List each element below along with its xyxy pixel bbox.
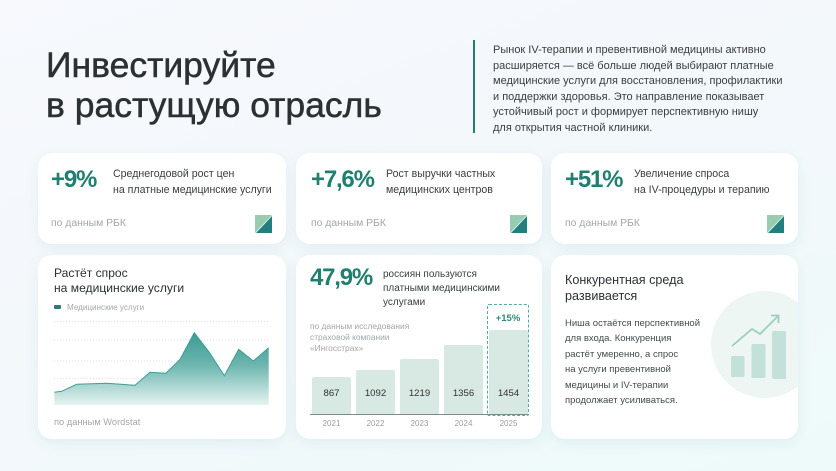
source: по данным РБК (311, 218, 386, 229)
source: по данным РБК (565, 218, 640, 229)
legend: Медицинские услуги (67, 303, 144, 312)
stat description: на IV-процедуры и терапию (634, 184, 769, 196)
bar chart: 2022 (367, 419, 384, 428)
bar chart: 2025 (500, 419, 517, 428)
survey source: «Ингосстрах» (310, 343, 363, 353)
body text: продолжает усиливаться. (565, 395, 678, 406)
survey source (310, 321, 409, 353)
bar chart: 867 (323, 388, 340, 399)
survey source: по данным исследования (310, 321, 409, 331)
body text: Ниша остаётся перспективной (565, 318, 700, 329)
intro text block: устойчивый рост и формирует перспективную нишу (493, 106, 758, 118)
title: в растущую отрасль (46, 85, 382, 125)
bar chart: 2021 (323, 419, 340, 428)
source: по данным Wordstat (54, 417, 140, 427)
bar chart: 1219 (409, 388, 430, 399)
intro text block (473, 40, 782, 133)
intro text block: Рынок IV-терапии и превентивной медицины активно (493, 44, 766, 56)
survey source: страховой компании (310, 332, 389, 342)
title (46, 45, 382, 125)
body text: растёт умеренно, а спрос (565, 349, 678, 360)
panel: stat +9% (38, 153, 286, 244)
panel: stat +7,6% (296, 153, 542, 244)
icon: split square (255, 215, 272, 233)
stat description: Рост выручки частных (386, 168, 495, 180)
stat number: +7,6% (311, 166, 374, 193)
bar chart: 2023 (411, 419, 428, 428)
chart heading: на медицинские услуги (54, 281, 184, 295)
heading: развивается (565, 288, 637, 302)
icon: split square (767, 215, 784, 233)
stat description (113, 168, 272, 196)
stat description: на платные медицинские услуги (113, 184, 272, 196)
stat description (386, 168, 495, 196)
icon: growth chart in circle (711, 291, 798, 398)
bar chart: 2024 (455, 419, 472, 428)
body text: для входа. Конкуренция (565, 333, 671, 344)
bar chart: 1454 (498, 388, 519, 399)
panel: stat +51% (551, 153, 798, 244)
source: по данным РБК (51, 218, 126, 229)
intro text block: медицинские услуги для восстановления, профилактики (493, 75, 782, 87)
stat description: Увеличение спроса (634, 168, 729, 180)
chart heading: Растёт спрос (54, 266, 128, 280)
stat number: +51% (565, 166, 622, 193)
survey description: россиян пользуются (383, 269, 477, 280)
heading (565, 273, 684, 302)
stat description: Среднегодовой рост цен (113, 168, 234, 180)
stat description: медицинских центров (386, 184, 493, 196)
body text: на услуги превентивной (565, 364, 671, 375)
body text: медицины и IV-терапии (565, 380, 668, 391)
survey number: 47,9% (310, 264, 372, 291)
survey description: услугами (383, 297, 425, 308)
bar chart: 1356 (453, 388, 474, 399)
body text (565, 318, 700, 406)
intro text block: расширяется — всё больше людей выбирают платные (493, 60, 774, 72)
intro text block: для открытия частной клиники. (493, 122, 652, 134)
panel: demand chart (38, 255, 286, 439)
panel: survey and bar chart (296, 255, 542, 439)
survey description (383, 269, 500, 308)
survey description: платными медицинскими (383, 283, 500, 294)
stat description (634, 168, 769, 196)
title: Инвестируйте (46, 45, 276, 85)
intro text block: и поддержки здоровья. Это направление показывает (493, 90, 764, 102)
bar chart: +15% (496, 313, 520, 324)
bar chart: 1092 (365, 388, 386, 399)
icon: split square (510, 215, 527, 233)
heading: Конкурентная среда (565, 273, 684, 287)
chart heading (54, 266, 184, 295)
panel: competition (551, 255, 798, 439)
stat number: +9% (51, 166, 96, 193)
